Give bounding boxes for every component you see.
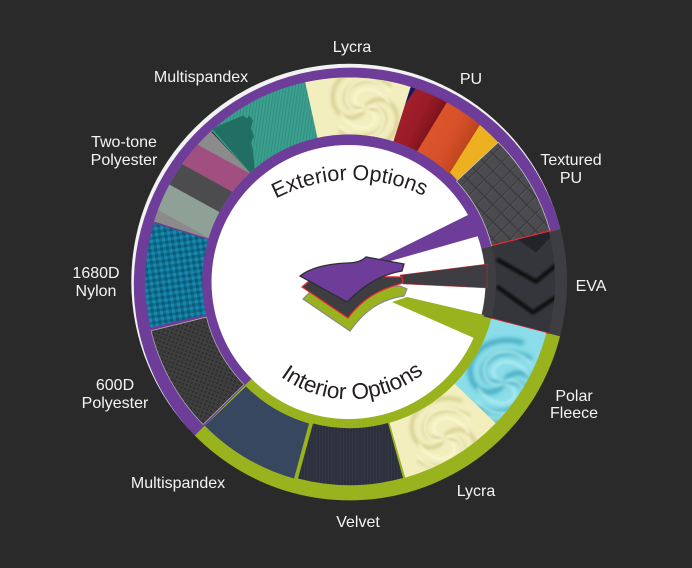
heading: Interior Options: Interior Options xyxy=(282,365,422,402)
layer: purple upper xyxy=(300,257,404,302)
label: Textured PU: Textured xyxy=(540,152,602,169)
panel: material wheel xyxy=(131,64,567,500)
label: Velvet: Velvet xyxy=(336,514,380,531)
yellow band xyxy=(450,125,498,180)
label: EVA: EVA xyxy=(576,278,607,295)
wedge: EVA pointer xyxy=(400,264,487,288)
label: Textured PU: PU xyxy=(560,170,582,187)
labels xyxy=(72,39,607,531)
red edges of EVA xyxy=(492,230,551,334)
swatch: Lycra interior xyxy=(390,384,496,478)
red band xyxy=(394,87,448,152)
ring: EVA dark xyxy=(349,229,567,336)
ring: interior green xyxy=(195,282,560,500)
swatch: Multispandex interior xyxy=(205,386,309,478)
swatch: Polar Fleece xyxy=(454,318,546,424)
swatch: Textured PU xyxy=(456,142,550,246)
ring: exterior purple xyxy=(134,68,560,436)
swatch: Lycra exterior xyxy=(305,78,410,142)
navy sliver xyxy=(405,87,416,104)
label: Two-tone Polyester: Polyester xyxy=(91,152,158,169)
icon: layered shoe material xyxy=(300,257,407,331)
orange band xyxy=(417,100,483,174)
label: Multispandex top: Multispandex xyxy=(154,69,248,86)
wedge: exterior pointer xyxy=(377,215,482,262)
swatch: Multispandex teal xyxy=(212,82,318,173)
label: PU: PU xyxy=(460,71,482,88)
label: Two-tone Polyester: Two-tone xyxy=(91,134,157,151)
label: Multispandex bottom: Multispandex xyxy=(131,475,225,492)
swatch: 600D Polyester xyxy=(151,317,244,424)
panel: white centre xyxy=(212,145,486,419)
swatch: 1680D Nylon xyxy=(145,224,208,328)
label: Polar Fleece: Fleece xyxy=(550,405,598,422)
outer white rim xyxy=(131,64,567,499)
wedge: interior pointer xyxy=(392,297,484,338)
swatch: Two-tone Polyester xyxy=(154,130,250,238)
layer: EVA foam xyxy=(302,276,403,318)
label: 600D Polyester: Polyester xyxy=(82,395,149,412)
label: 1680D Nylon: Nylon xyxy=(76,283,116,300)
swatch: PU xyxy=(394,87,498,180)
heading: Exterior Options: Exterior Options xyxy=(271,165,427,198)
label: 1680D Nylon: 1680D xyxy=(72,265,120,282)
label: Lycra top: Lycra xyxy=(333,39,371,56)
label: Lycra bottom: Lycra xyxy=(457,483,495,500)
swatch: EVA xyxy=(491,232,555,332)
layer: green lining xyxy=(303,286,407,331)
label: Polar Fleece: Polar xyxy=(555,388,593,405)
label: 600D Polyester: 600D xyxy=(96,377,134,394)
swatch: Velvet xyxy=(298,423,403,485)
